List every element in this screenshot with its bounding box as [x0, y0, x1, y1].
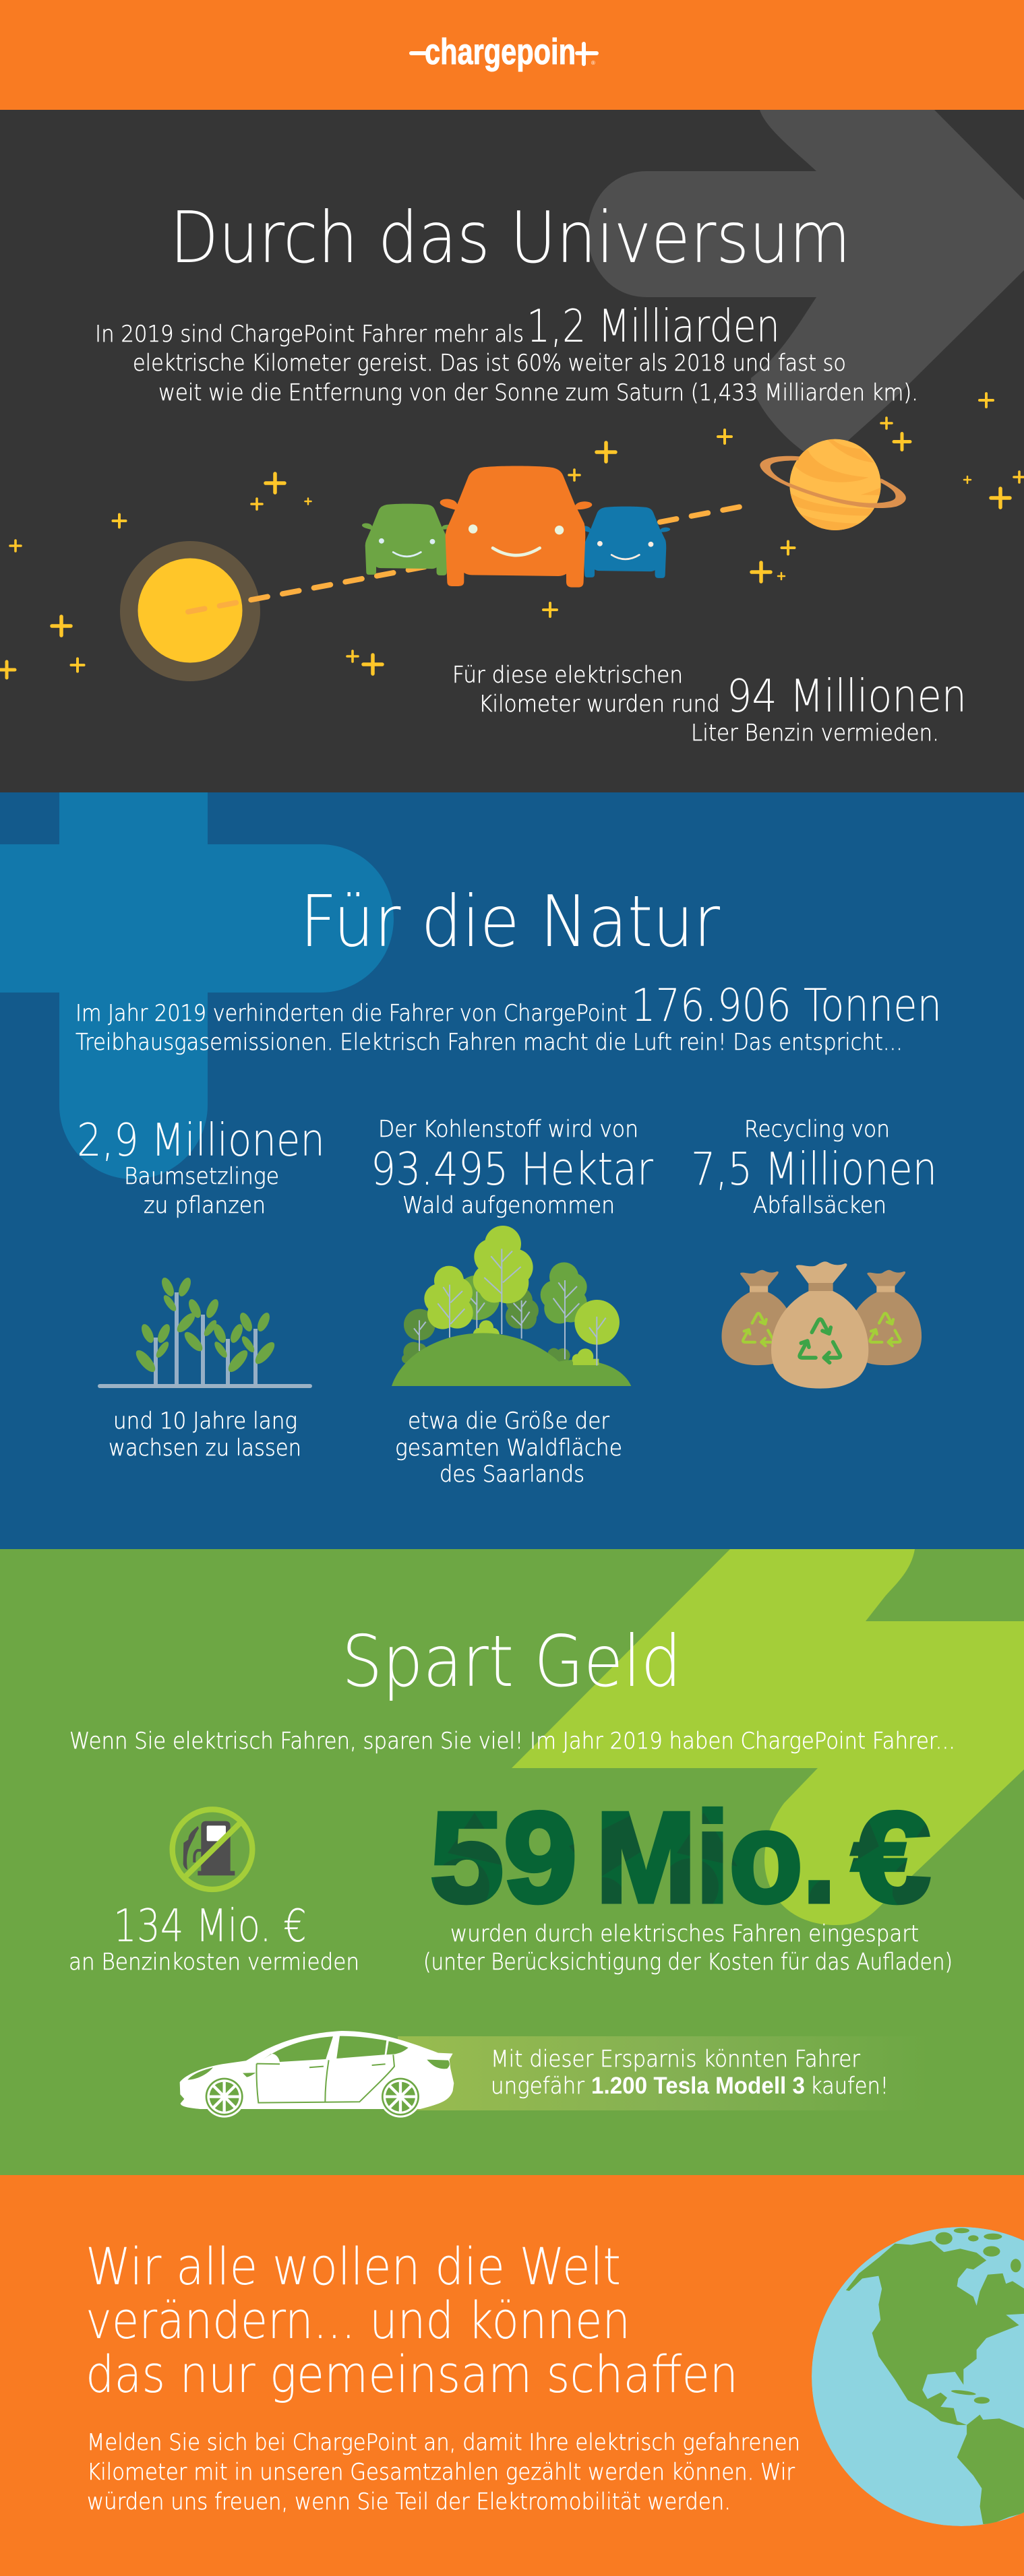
stat: 59 Mio. €: € — [852, 1786, 930, 1929]
column: recycling text: 7,5 Millionen — [691, 1143, 937, 1195]
forest caption: des Saarlands — [440, 1461, 584, 1488]
panel: closing call to action — [0, 2175, 1024, 2576]
right back sack — [849, 1270, 922, 1365]
stat: 59 Mio. € — [423, 1786, 953, 1976]
title: Für die Natur — [300, 881, 721, 963]
column: forest text: Der Kohlenstoff wird von — [378, 1116, 638, 1143]
column: forest text: Wald aufgenommen — [402, 1192, 615, 1219]
stat: 59 Mio. €: 59 — [430, 1786, 577, 1929]
sun — [120, 541, 260, 681]
intro text: Wenn Sie elektrisch Fahren, sparen Sie viel! Im Jahr 2019 haben ChargePoint Fahrer... — [69, 1728, 955, 1755]
stars — [0, 394, 1024, 678]
panel: Spart Geld — [0, 1549, 1024, 2175]
rear wheel — [380, 2076, 421, 2118]
green car — [362, 504, 452, 575]
closing body text: Kilometer mit in unseren Gesamtzahlen gezählt werden können. Wir — [87, 2459, 795, 2486]
icon: globe — [812, 2227, 1024, 2526]
column: saplings text: zu pflanzen — [144, 1192, 266, 1219]
tesla callout text — [491, 2046, 889, 2100]
logo: chargepoint: chargepoin — [425, 32, 576, 72]
background lightning bolt — [512, 1549, 1024, 1925]
column: recycling text: Abfallsäcken — [753, 1192, 886, 1219]
icon: recycling sacks — [721, 1261, 922, 1389]
left back sack — [721, 1270, 795, 1365]
stat: 134 Mio. €: 134 Mio. € — [113, 1899, 307, 1952]
icon: no petrol pump — [173, 1809, 252, 1889]
petrol avoided text: Kilometer wurden rund — [479, 691, 720, 718]
front sack — [771, 1261, 868, 1389]
header bar — [0, 0, 1024, 110]
saplings caption — [109, 1408, 301, 1462]
front wheel — [204, 2076, 245, 2118]
column: forest text: 93.495 Hektar — [371, 1143, 653, 1195]
column: saplings text — [77, 1114, 325, 1219]
background chevron arrow — [588, 110, 1024, 465]
intro text — [95, 300, 918, 406]
column: saplings text: 2,9 Millionen — [77, 1114, 325, 1166]
intro text — [76, 979, 942, 1056]
closing body text: würden uns freuen, wenn Sie Teil der Elektromobilität werden. — [87, 2488, 731, 2515]
stat: 134 Mio. € — [69, 1899, 359, 1976]
closing heading: das nur gemeinsam schaffen — [86, 2344, 738, 2404]
petrol avoided text: Liter Benzin vermieden. — [691, 720, 939, 747]
tesla callout text: 1.200 Tesla Modell 3 — [591, 2073, 805, 2099]
blue car — [580, 507, 670, 578]
saturn — [760, 438, 906, 531]
logo: chargepoint: ® — [591, 60, 595, 66]
icon: saplings — [98, 1276, 312, 1388]
forest caption — [395, 1408, 622, 1488]
column: recycling text: Recycling von — [744, 1116, 890, 1143]
intro text: In 2019 sind ChargePoint Fahrer mehr als — [95, 321, 524, 348]
orange car — [440, 466, 592, 588]
gradient callout band — [398, 2036, 928, 2110]
icon: forest on hills — [392, 1226, 631, 1386]
column: forest text — [371, 1116, 653, 1219]
petrol avoided text — [452, 662, 967, 747]
background plus shape — [0, 792, 394, 1179]
icon: white electric car — [180, 2031, 454, 2118]
closing heading — [86, 2236, 738, 2404]
saplings caption: und 10 Jahre lang — [113, 1408, 297, 1435]
dashed route sun to saturn — [188, 505, 748, 612]
saplings caption: wachsen zu lassen — [109, 1435, 301, 1462]
forest caption: gesamten Waldfläche — [395, 1435, 622, 1462]
column: recycling text — [691, 1116, 937, 1219]
tesla callout text: Mit dieser Ersparnis könnten Fahrer — [491, 2046, 860, 2073]
tesla callout text: ungefähr — [491, 2073, 584, 2100]
title: Durch das Universum — [170, 197, 851, 279]
intro text: Treibhausgasemissionen. Elektrisch Fahren macht die Luft rein! Das entspricht... — [76, 1029, 903, 1056]
smiling cars — [362, 466, 670, 588]
title: Spart Geld — [342, 1621, 682, 1703]
intro text: 1,2 Milliarden — [526, 300, 780, 352]
panel: Durch das Universum — [0, 110, 1024, 792]
panel: Für die Natur — [0, 792, 1024, 1549]
stat: 59 Mio. €: wurden durch elektrisches Fahren eingespart — [450, 1920, 919, 1947]
column: saplings text: Baumsetzlinge — [124, 1163, 279, 1190]
tesla callout text: kaufen! — [810, 2073, 889, 2100]
closing body text — [87, 2429, 800, 2515]
intro text: Im Jahr 2019 verhinderten die Fahrer von ChargePoint — [76, 1000, 627, 1027]
intro text: 176.906 Tonnen — [631, 979, 942, 1032]
stat: 59 Mio. €: Mio. — [596, 1786, 836, 1929]
closing heading: verändern... und können — [86, 2290, 630, 2350]
closing heading: Wir alle wollen die Welt — [86, 2236, 621, 2296]
stat: 134 Mio. €: an Benzinkosten vermieden — [69, 1949, 359, 1976]
intro text: weit wie die Entfernung von der Sonne zum Saturn (1,433 Milliarden km). — [158, 379, 918, 406]
intro text: elektrische Kilometer gereist. Das ist 60% weiter als 2018 und fast so — [133, 350, 846, 377]
stat: 59 Mio. €: (unter Berücksichtigung der Kosten für das Aufladen) — [423, 1949, 953, 1976]
petrol avoided text: Für diese elektrischen — [452, 662, 683, 689]
closing body text: Melden Sie sich bei ChargePoint an, damit Ihre elektrisch gefahrenen — [87, 2429, 800, 2456]
forest caption: etwa die Größe der — [408, 1408, 609, 1435]
petrol avoided text: 94 Millionen — [727, 670, 967, 722]
